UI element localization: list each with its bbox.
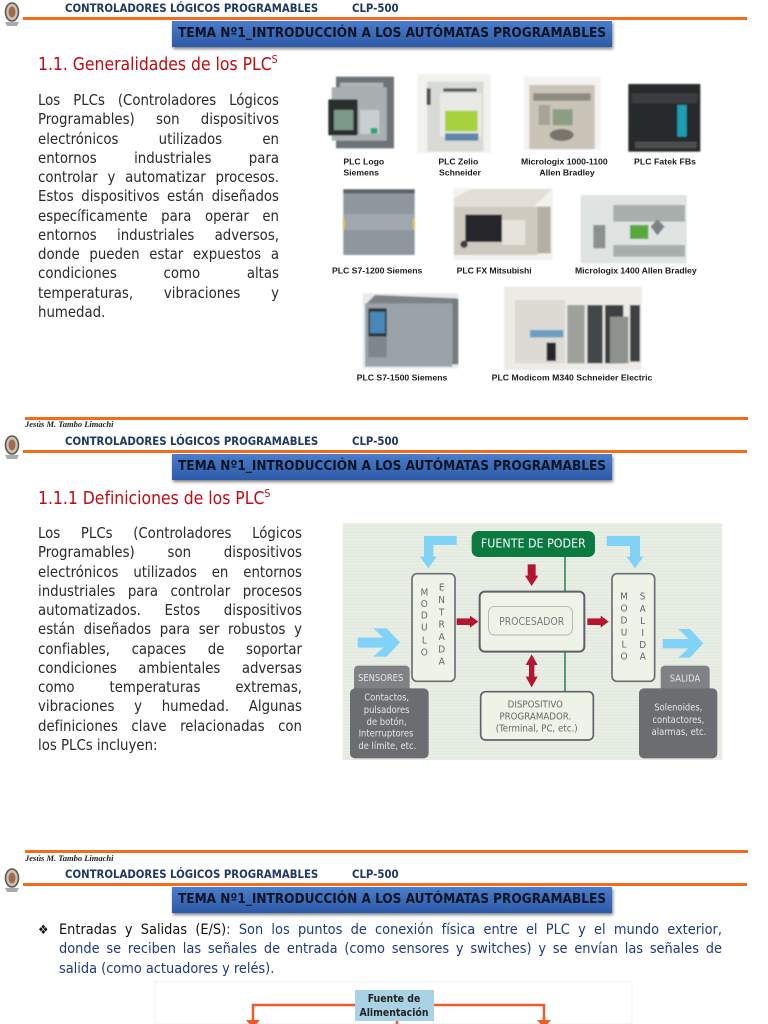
output module: D <box>639 640 646 651</box>
text block: entradas y salidas: salida (como actuadores y relés). <box>59 960 274 976</box>
PLC Fatek FBs: PLC Fatek FBs <box>634 157 696 167</box>
output module <box>612 574 655 681</box>
output devices box: alarmas, etc. <box>652 727 706 738</box>
sensors box: SENSORES <box>358 673 403 684</box>
author rule <box>25 850 748 853</box>
PLC Modicom M340 <box>492 287 653 383</box>
programming device <box>481 692 593 740</box>
PLC Zelio Schneider <box>417 74 491 177</box>
power supply box <box>355 990 434 1021</box>
input module: O <box>421 599 428 610</box>
input module: U <box>421 623 428 634</box>
output module: M <box>620 592 628 603</box>
text block: entradas y salidas: donde se reciben las señales de entrada (como sensores y switches) y se envían las señales de <box>59 941 722 957</box>
text block: PLC description: específicamente para operar en <box>38 208 279 224</box>
text block: definition: automatizados. Estos dispositivos <box>38 602 302 619</box>
PLC S7-1500 Siemens <box>357 293 458 383</box>
panel: generalidades de los PLC <box>4 1 747 383</box>
text block: PLC description: entornos industriales adversos, <box>38 227 279 244</box>
text block: definition: están diseñados para ser robustos y <box>38 621 302 638</box>
sensors box: Contactos, <box>364 693 409 704</box>
output module: O <box>620 652 628 663</box>
input module <box>412 574 455 681</box>
course code: CLP-500 <box>352 2 399 15</box>
output devices box <box>639 666 717 758</box>
text block: PLC description <box>38 92 279 321</box>
orange rule <box>23 883 747 886</box>
PLC S7-1200 Siemens: PLC S7-1200 Siemens <box>332 266 423 276</box>
text block: definition: los PLCs incluyen: <box>38 737 158 754</box>
sensors box: de botón, <box>367 717 407 728</box>
power supply box: Fuente de <box>368 993 420 1005</box>
page header 3 <box>4 867 747 918</box>
output module: I <box>641 628 644 639</box>
icon: bullet: ❖ <box>38 923 48 938</box>
topic banner <box>172 21 612 47</box>
text block: PLC description: controlar y automatizar procesos. <box>38 169 279 186</box>
arrowheads <box>246 1020 551 1024</box>
icon: university crest <box>4 435 20 459</box>
topic banner: TEMA Nº1_INTRODUCCIÓN A LOS AUTÓMATAS PROGRAMABLES <box>178 25 606 41</box>
text block: PLC description: humedad. <box>38 304 105 321</box>
text block: PLC description: Programables) son dispositivos <box>38 111 279 128</box>
text block: entradas y salidas: Entradas y Salidas (E/S): Son los puntos de conexión física entre el PLC y el mundo exterior, <box>59 922 722 938</box>
Micrologix 1000-1100: Allen Bradley <box>539 167 595 177</box>
output module: S <box>640 592 646 603</box>
text block: PLC description: condiciones como altas <box>38 265 279 282</box>
output module: L <box>621 639 627 650</box>
heading: 1.1 generalidades: 1.1. Generalidades de los PLCS <box>38 54 278 75</box>
connector lines <box>253 1005 544 1024</box>
PLC Logo Siemens: Siemens <box>343 167 379 177</box>
sensors box: Interruptores <box>359 729 413 740</box>
input module: D <box>438 644 445 655</box>
text block: PLC description: Los PLCs (Controladores Lógicos <box>38 92 279 109</box>
heading: 1.1.1 definiciones: 1.1.1 Definiciones de los PLCS <box>38 488 270 509</box>
input module: A <box>439 632 446 643</box>
power supply box: Alimentación <box>360 1007 428 1019</box>
PLC Modicom M340: PLC Modicom M340 Schneider Electric <box>492 373 653 383</box>
sensors box <box>350 666 429 758</box>
Micrologix 1000-1100 <box>521 77 608 177</box>
text block: definition <box>38 525 302 754</box>
output devices box: contactores, <box>652 715 704 726</box>
page header 1 <box>4 1 747 52</box>
text block: definition: Programables) son dispositivos <box>38 544 302 561</box>
text block: entradas y salidas <box>59 922 722 976</box>
PLC Zelio Schneider: PLC Zelio <box>438 157 478 167</box>
PLC FX Mitsubishi: PLC FX Mitsubishi <box>457 266 532 276</box>
icon: university crest <box>4 868 20 892</box>
topic banner <box>172 887 612 913</box>
text block: PLC description: electrónicos utilizados en <box>38 130 279 148</box>
text block: PLC description: donde pueden estar expuestos a <box>38 246 279 263</box>
topic banner: TEMA Nº1_INTRODUCCIÓN A LOS AUTÓMATAS PROGRAMABLES <box>178 458 606 474</box>
input module: E <box>439 582 445 593</box>
red signal arrows <box>457 564 609 687</box>
author signature: Jesús M. Tambo Limachi <box>25 419 113 429</box>
input module: L <box>422 636 427 647</box>
output module: U <box>621 627 627 638</box>
text block: definition: confiables, capaces de soportar <box>38 640 302 658</box>
processor <box>480 592 584 652</box>
author rule <box>25 417 748 420</box>
sensors box: de límite, etc. <box>358 741 416 752</box>
input module: A <box>439 657 446 668</box>
power supply <box>472 531 595 692</box>
input module: N <box>438 595 445 606</box>
course code: CLP-500 <box>352 868 399 881</box>
text block: definition: Los PLCs (Controladores Lógicos <box>38 525 302 542</box>
PLC S7-1200 Siemens <box>332 189 423 276</box>
course code: CLP-500 <box>352 435 399 448</box>
text block: PLC description: Estos dispositivos están diseñados <box>38 188 279 205</box>
output devices box: SALIDA <box>670 674 700 685</box>
text block: definition: como temperaturas extremas, <box>38 679 302 696</box>
text block: PLC description: temperaturas, vibraciones y <box>38 284 279 302</box>
course title: CONTROLADORES LÓGICOS PROGRAMABLES <box>65 2 318 15</box>
orange rule <box>23 17 747 20</box>
course title: CONTROLADORES LÓGICOS PROGRAMABLES <box>65 868 318 881</box>
diagram: power supply distribution <box>154 982 632 1024</box>
text block: definition: electrónicos utilizados en entornos <box>38 564 302 580</box>
text block: definition: definiciones clave relacionadas con <box>38 718 302 734</box>
text block: definition: industriales para controlar procesos <box>38 583 302 600</box>
topic banner: TEMA Nº1_INTRODUCCIÓN A LOS AUTÓMATAS PROGRAMABLES <box>178 891 606 907</box>
Micrologix 1400 Allen Bradley <box>575 195 697 276</box>
programming device: PROGRAMADOR. <box>499 711 571 722</box>
icon: university crest <box>4 2 20 26</box>
Micrologix 1400 Allen Bradley: Micrologix 1400 Allen Bradley <box>575 266 697 276</box>
PLC Zelio Schneider: Schneider <box>439 167 481 177</box>
panel: entradas y salidas <box>4 850 748 1024</box>
input module: M <box>420 587 428 598</box>
power supply: FUENTE DE PODER <box>481 536 586 550</box>
processor: PROCESADOR <box>499 616 565 628</box>
input module: O <box>421 647 428 658</box>
panel: definiciones de los PLC <box>4 417 748 760</box>
PLC FX Mitsubishi <box>453 188 553 276</box>
text block: definition: condiciones ambientales adversas <box>38 660 302 677</box>
output module: A <box>640 652 647 663</box>
text block: definition: vibraciones y humedad. Algunas <box>38 698 302 715</box>
PLC Fatek FBs <box>628 84 700 167</box>
programming device: (Terminal, PC, etc.) <box>496 724 578 735</box>
PLC Logo Siemens: PLC Logo <box>343 157 384 167</box>
output module: D <box>621 615 628 626</box>
output module: O <box>620 603 628 614</box>
output devices box: Solenoides, <box>654 703 702 714</box>
text block: PLC description: entornos industriales para <box>38 150 279 167</box>
input module: D <box>421 611 428 622</box>
orange rule <box>23 450 747 453</box>
topic banner <box>172 454 612 480</box>
programming device: DISPOSITIVO <box>508 699 563 710</box>
input module: R <box>439 620 445 631</box>
input module: T <box>438 607 445 618</box>
author signature: Jesús M. Tambo Limachi <box>25 853 113 863</box>
PLC S7-1500 Siemens: PLC S7-1500 Siemens <box>357 373 448 383</box>
PLC Logo Siemens <box>328 77 394 177</box>
sensors box: pulsadores <box>364 705 410 716</box>
output module: A <box>640 604 647 615</box>
page header 2 <box>4 434 747 484</box>
Micrologix 1000-1100: Micrologix 1000-1100 <box>521 157 608 167</box>
diagram: PLC architecture <box>342 523 722 760</box>
output module: L <box>640 616 645 627</box>
image grid: PLC models <box>327 74 702 383</box>
blue flow arrows <box>358 536 703 658</box>
course title: CONTROLADORES LÓGICOS PROGRAMABLES <box>65 435 318 448</box>
